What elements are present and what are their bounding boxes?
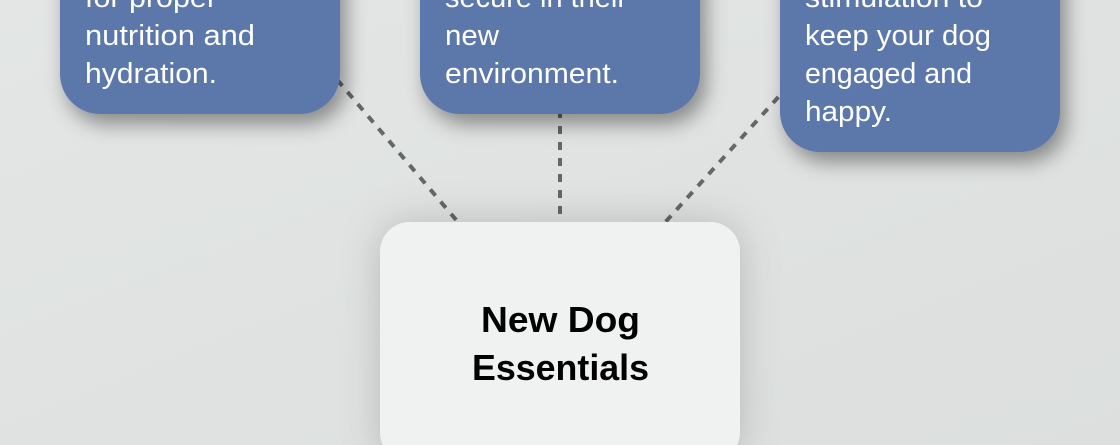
panel: nutrition card: nutrition and — [85, 20, 255, 52]
panel: environment card — [420, 0, 700, 114]
panel: nutrition card: hydration. — [85, 58, 217, 90]
dashed connectors — [337, 80, 789, 230]
panel: environment card: new — [445, 20, 499, 52]
panel: stimulation card: engaged and — [805, 58, 972, 90]
panel: stimulation card — [780, 0, 1060, 152]
panel: central title card — [380, 222, 740, 445]
heading: Essentials — [472, 347, 649, 388]
heading — [472, 299, 649, 388]
panel: nutrition card — [60, 0, 340, 114]
panel: stimulation card: keep your dog — [805, 20, 991, 52]
heading: New Dog — [481, 299, 640, 340]
panel: environment card: environment. — [445, 58, 619, 90]
panel: stimulation card: happy. — [805, 96, 892, 128]
